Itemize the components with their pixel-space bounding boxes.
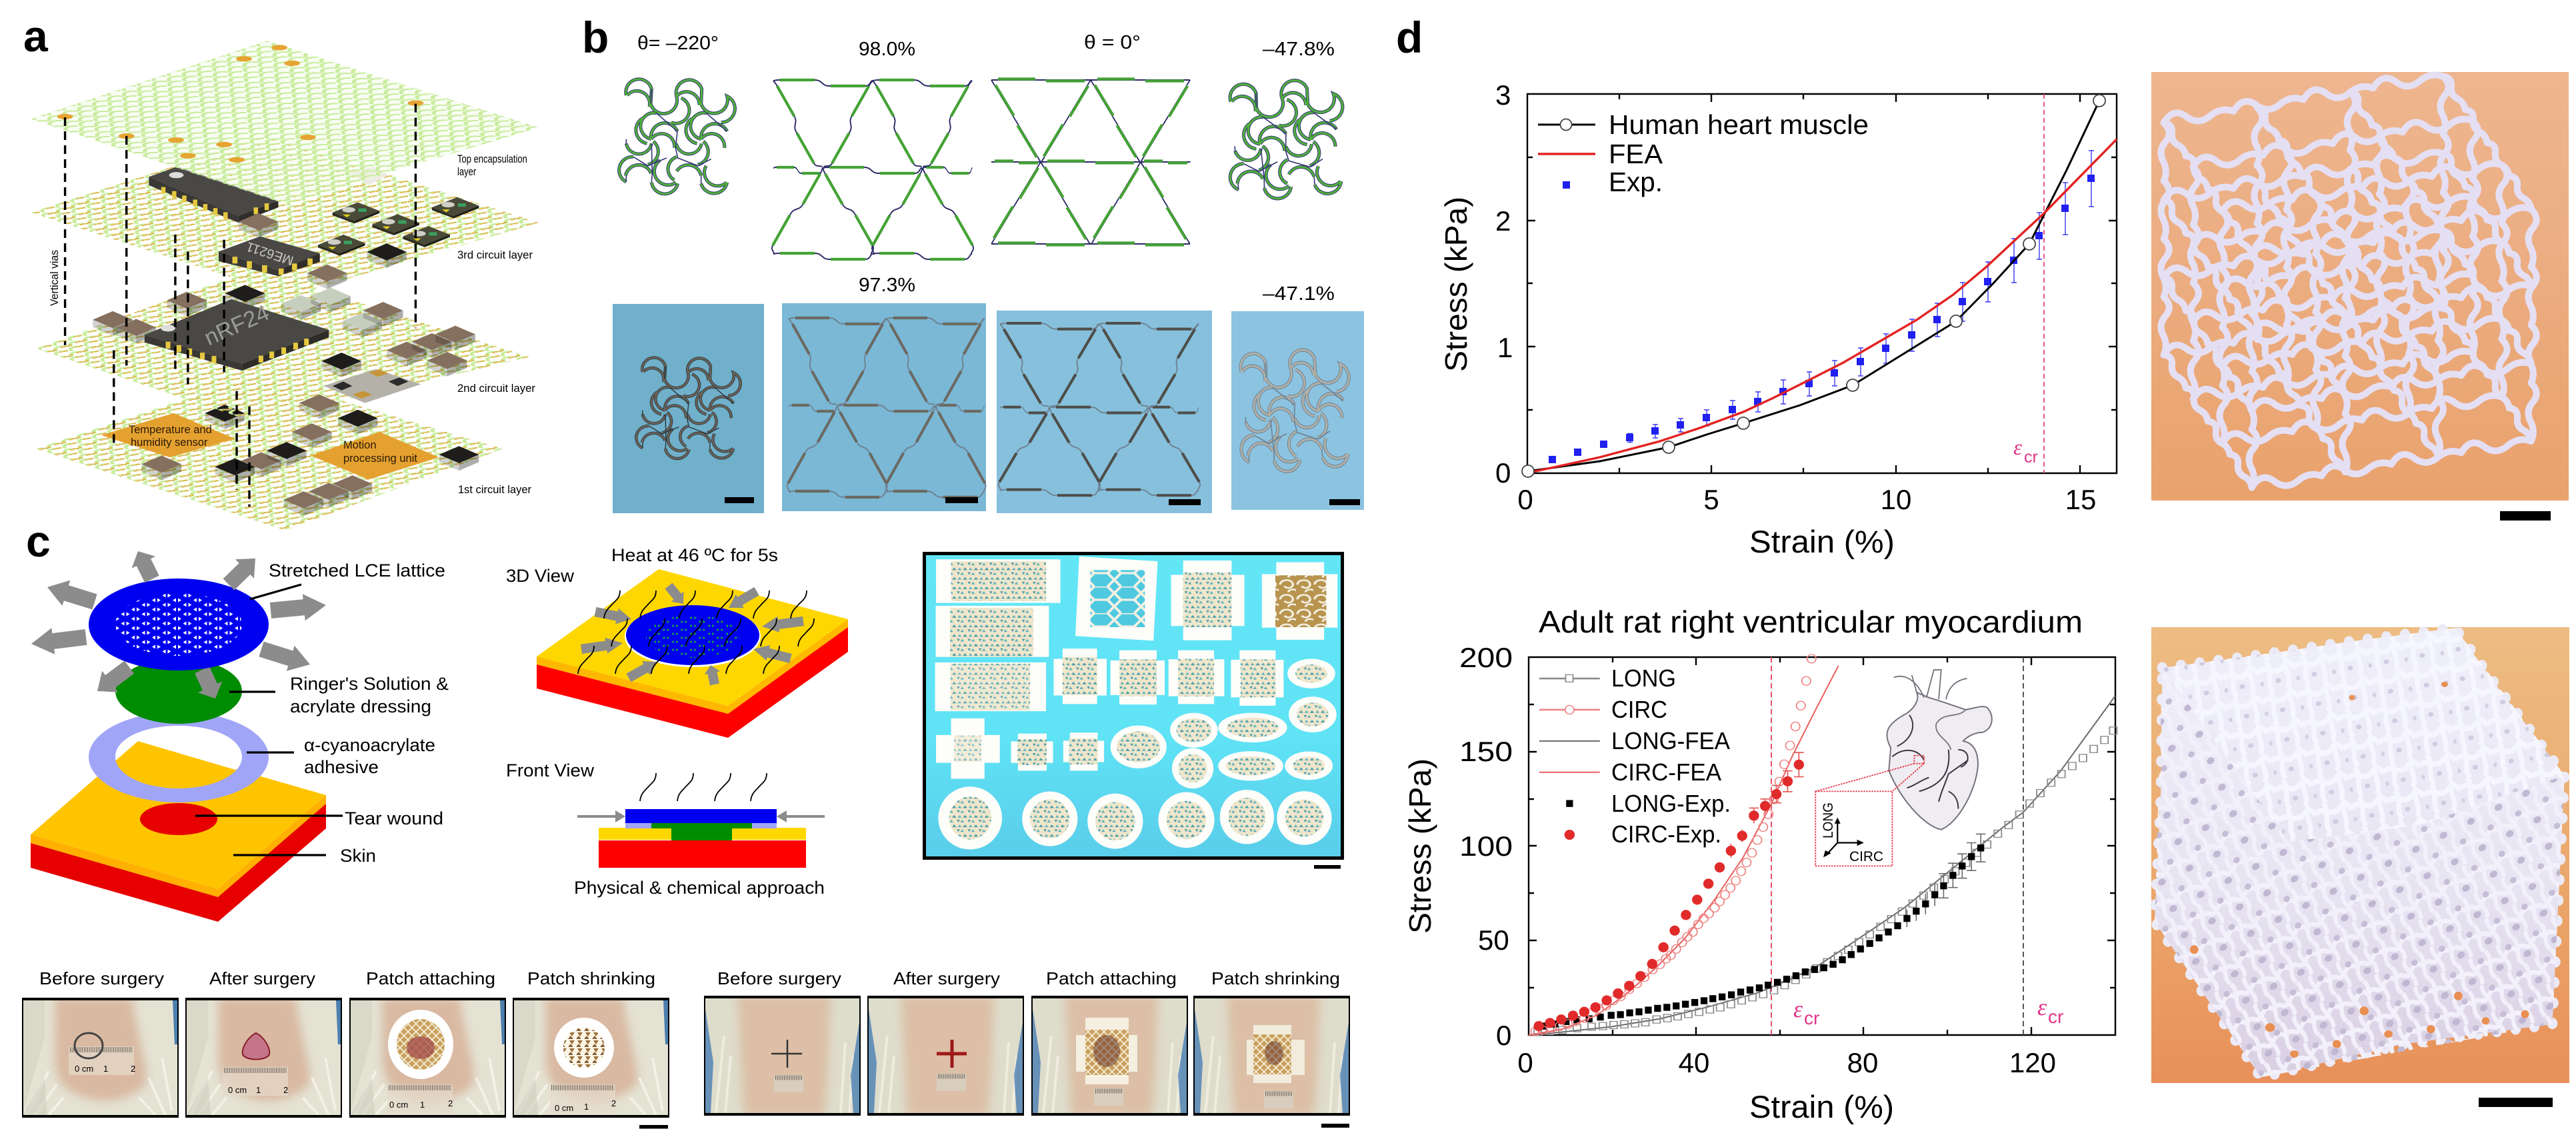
label skin: Skin bbox=[340, 846, 376, 866]
caption before surgery A: Before surgery bbox=[39, 968, 164, 988]
diagram compressed lattice left bbox=[619, 79, 735, 194]
rat photo patch shrinking circle bbox=[513, 998, 669, 1118]
LONG exp error bars bbox=[1907, 834, 1985, 927]
heading 98.0%: 98.0% bbox=[859, 39, 915, 60]
FEA red curve bbox=[1533, 139, 2117, 472]
CIRC exp red dots bbox=[1539, 764, 1799, 1026]
arrow stretch 5 bbox=[190, 664, 227, 704]
caption after surgery B: After surgery bbox=[893, 968, 1000, 988]
photo compressed lattice right bbox=[1231, 311, 1364, 510]
label temperature sensor: Temperature and bbox=[129, 424, 212, 436]
CIRC open circles bbox=[1535, 658, 1811, 1031]
caption patch shrinking B: Patch shrinking bbox=[1211, 968, 1340, 988]
epsilon label right: cr bbox=[2048, 1006, 2063, 1027]
legend labels: CIRC bbox=[1611, 696, 1667, 723]
panel label a: a bbox=[23, 11, 49, 61]
heading theta 0: θ = 0° bbox=[1084, 32, 1141, 53]
y tick labels: 0 bbox=[1495, 457, 1511, 489]
epsilon label: cr bbox=[2024, 448, 2038, 467]
skin block bbox=[31, 741, 326, 922]
chart title: Adult rat right ventricular myocardium bbox=[1539, 604, 2083, 639]
rat photo patch shrinking circle: 1 bbox=[584, 1102, 589, 1112]
1st circuit layer bbox=[36, 374, 503, 531]
rat photo after surgery cross bbox=[867, 996, 1024, 1116]
stretched LCE lattice disc bbox=[89, 578, 269, 670]
data series and heart bbox=[1529, 658, 2115, 1035]
panel label b: b bbox=[582, 13, 609, 62]
label acrylate dressing: acrylate dressing bbox=[290, 696, 431, 716]
chip text ME6211: ME6211 bbox=[245, 239, 295, 268]
label tear wound: Tear wound bbox=[345, 808, 443, 828]
chip text nRF24: nRF24 bbox=[201, 300, 273, 351]
legend labels: CIRC-FEA bbox=[1611, 758, 1721, 786]
rat photo patch attaching circle: 1 bbox=[420, 1100, 425, 1110]
rat photo patch attaching circle bbox=[349, 998, 506, 1118]
label cyanoacrylate: α-cyanoacrylate bbox=[304, 735, 435, 755]
rat photo patch shrinking circle: 2 bbox=[611, 1098, 616, 1108]
rat photo patch attaching circle: 2 bbox=[448, 1098, 453, 1108]
label top encapsulation layer: layer bbox=[457, 166, 477, 178]
scale bar photos A bbox=[639, 1125, 668, 1129]
panel a: exploded multilayer circuit bbox=[23, 11, 539, 531]
diagram compressed lattice right bbox=[1222, 76, 1350, 203]
label 3D view: 3D View bbox=[506, 566, 574, 586]
chart: adult rat right ventricular myocardium bbox=[1403, 604, 2115, 1124]
diagram stretched lattice bbox=[769, 80, 977, 259]
label 2nd circuit layer: 2nd circuit layer bbox=[457, 383, 535, 395]
CIRC exp error bars bbox=[1720, 752, 1804, 872]
heart illustration bbox=[1887, 670, 1992, 830]
critical strain line bbox=[2043, 94, 2045, 473]
label temperature sensor: humidity sensor bbox=[131, 437, 208, 449]
legend bbox=[1538, 109, 1869, 197]
rat photo before surgery circle bbox=[22, 998, 179, 1118]
adhesive ring bbox=[89, 712, 269, 802]
exp blue squares bbox=[1549, 175, 2095, 463]
legend labels: LONG bbox=[1611, 664, 1676, 692]
label motion unit: processing unit bbox=[343, 453, 417, 465]
caption before surgery B: Before surgery bbox=[717, 968, 841, 988]
rat photo patch attaching circle: 0 cm bbox=[389, 1100, 408, 1110]
y tick labels: 150 bbox=[1459, 736, 1513, 767]
heat lines bbox=[578, 590, 814, 674]
rat photo patch shrinking circle: 0 cm bbox=[555, 1103, 573, 1113]
exploded assembly bbox=[30, 545, 343, 922]
scale bar cube 2 bbox=[2479, 1098, 2553, 1107]
rat photo before surgery cross bbox=[704, 996, 861, 1116]
plot frame and ticks bbox=[1529, 657, 2115, 1035]
green dressing bbox=[115, 658, 242, 724]
human heart muscle black curve bbox=[1528, 101, 2099, 471]
x tick labels: 10 bbox=[1881, 484, 1911, 515]
critical strain line pink bbox=[1771, 657, 1772, 1035]
collage samples bbox=[935, 557, 1337, 850]
y tick labels: 0 bbox=[1496, 1020, 1511, 1051]
caption patch shrinking A: Patch shrinking bbox=[527, 968, 655, 988]
label physical and chemical approach: Physical & chemical approach bbox=[574, 878, 825, 898]
caption patch attaching A: Patch attaching bbox=[366, 968, 495, 988]
LONG FEA line bbox=[1529, 696, 2115, 1035]
photo stretched lattice bbox=[782, 303, 989, 511]
x tick labels: 15 bbox=[2065, 484, 2096, 515]
front view schematic bbox=[577, 773, 825, 868]
inset label CIRC: CIRC bbox=[1849, 849, 1883, 864]
epsilon label right: ε bbox=[2037, 994, 2047, 1020]
x tick labels: 0 bbox=[1517, 1047, 1533, 1078]
panel label d: d bbox=[1396, 13, 1423, 62]
inward arrows bbox=[580, 580, 805, 686]
label adhesive: adhesive bbox=[304, 757, 379, 777]
label vertical vias: Vertical vias bbox=[48, 250, 61, 306]
y tick labels: 200 bbox=[1459, 642, 1513, 673]
scale bar photos B bbox=[1321, 1124, 1349, 1128]
heading -47.1%: –47.1% bbox=[1263, 283, 1335, 305]
x tick labels: 120 bbox=[2009, 1047, 2056, 1078]
legend labels: LONG-Exp. bbox=[1611, 790, 1731, 817]
collage scale bar bbox=[1314, 865, 1341, 869]
x axis title: Strain (%) bbox=[1749, 1089, 1894, 1124]
inset label LONG: LONG bbox=[1821, 802, 1836, 838]
label front view: Front View bbox=[506, 760, 595, 780]
label motion unit: Motion bbox=[343, 439, 377, 451]
label stretched LCE lattice: Stretched LCE lattice bbox=[269, 561, 445, 580]
epsilon label: ε bbox=[2013, 436, 2022, 460]
collage frame bbox=[924, 553, 1343, 858]
3D view block bbox=[537, 569, 848, 738]
y tick labels: 3 bbox=[1495, 79, 1511, 111]
heading 97.3%: 97.3% bbox=[859, 275, 915, 296]
legend labels: LONG-FEA bbox=[1611, 727, 1730, 754]
y tick labels: 50 bbox=[1478, 924, 1509, 956]
CIRC FEA line bbox=[1529, 666, 1839, 1035]
y axis title: Stress (kPa) bbox=[1403, 758, 1437, 934]
panel d: mechanical charts and 3D photos bbox=[1396, 13, 2569, 1124]
blue error bars bbox=[1627, 151, 2094, 443]
LONG open squares bbox=[1538, 730, 2113, 1032]
arrow stretch 6 bbox=[89, 656, 137, 702]
panel b: lattice diagrams and photos bbox=[582, 13, 1364, 513]
x tick labels: 0 bbox=[1517, 484, 1533, 515]
photo collage of patches bbox=[924, 553, 1343, 869]
photo: 3D lattice dense cube bbox=[2151, 627, 2569, 1083]
rat photo patch shrinking cross bbox=[1193, 996, 1350, 1116]
epsilon label left: ε bbox=[1793, 996, 1803, 1022]
rat photo after surgery circle: 1 bbox=[256, 1085, 261, 1095]
scale bar cube 1 bbox=[2500, 511, 2551, 521]
y axis title: Stress (kPa) bbox=[1439, 197, 1473, 372]
diagram straight lattice bbox=[991, 79, 1191, 245]
legend labels bbox=[1611, 664, 1731, 848]
tear wound bbox=[140, 803, 217, 835]
LONG exp black squares bbox=[1543, 848, 1981, 1026]
photo straight lattice bbox=[995, 311, 1212, 513]
label 1st circuit layer: 1st circuit layer bbox=[458, 484, 532, 496]
legend: Human heart muscle bbox=[1609, 109, 1869, 140]
layer illustration bbox=[31, 41, 539, 531]
2nd circuit layer bbox=[36, 269, 529, 422]
top encapsulation layer bbox=[31, 41, 539, 204]
label heat: Heat at 46 ºC for 5s bbox=[611, 545, 778, 565]
inset callout box bbox=[1815, 756, 1924, 866]
x tick labels: 5 bbox=[1703, 484, 1719, 515]
epsilon label left: cr bbox=[1804, 1008, 1819, 1028]
y tick labels: 1 bbox=[1497, 332, 1513, 363]
chart: human heart muscle stress-strain bbox=[1439, 79, 2117, 559]
legend: FEA bbox=[1609, 139, 1663, 169]
white cut of ring interior bbox=[115, 726, 242, 770]
y tick labels: 100 bbox=[1459, 830, 1513, 862]
rat photo after surgery circle bbox=[185, 998, 342, 1118]
vertical vias dashed lines bbox=[65, 104, 415, 507]
panel c: patch assembly schematics bbox=[22, 517, 1350, 1129]
critical strain line dark bbox=[2023, 657, 2024, 1035]
x axis title: Strain (%) bbox=[1749, 524, 1895, 559]
y tick labels: 2 bbox=[1495, 205, 1511, 237]
human heart circles bbox=[1522, 95, 2105, 477]
rat photo after surgery circle: 0 cm bbox=[228, 1085, 247, 1095]
arrows stretch outward bbox=[30, 545, 327, 677]
3rd circuit layer bbox=[31, 136, 539, 296]
plot frame and ticks bbox=[1527, 94, 2117, 473]
heading -47.8%: –47.8% bbox=[1263, 39, 1335, 60]
x tick labels: 80 bbox=[1847, 1047, 1878, 1078]
legend labels: CIRC-Exp. bbox=[1611, 820, 1721, 848]
photo compressed lattice left bbox=[613, 304, 764, 513]
legend: Exp. bbox=[1609, 167, 1663, 197]
rat photo after surgery circle: 2 bbox=[283, 1085, 288, 1095]
caption after surgery A: After surgery bbox=[209, 968, 315, 988]
leader lines bbox=[195, 584, 343, 855]
label ringer's solution: Ringer's Solution & bbox=[290, 674, 449, 694]
caption patch attaching B: Patch attaching bbox=[1046, 968, 1177, 988]
panel label c: c bbox=[26, 517, 51, 566]
x tick labels: 40 bbox=[1679, 1047, 1709, 1078]
label top encapsulation layer: Top encapsulation bbox=[457, 153, 546, 165]
photo: 3D lattice open cube bbox=[2151, 69, 2569, 501]
legend symbols bbox=[1539, 674, 1600, 840]
rat photo before surgery circle: 1 bbox=[103, 1064, 108, 1074]
rat photo before surgery circle: 0 cm bbox=[75, 1064, 93, 1074]
heading theta -220: θ= –220° bbox=[637, 33, 719, 54]
label 3rd circuit layer: 3rd circuit layer bbox=[457, 249, 533, 261]
rat photo before surgery circle: 2 bbox=[131, 1064, 135, 1074]
rat photo patch attaching cross bbox=[1031, 996, 1188, 1116]
